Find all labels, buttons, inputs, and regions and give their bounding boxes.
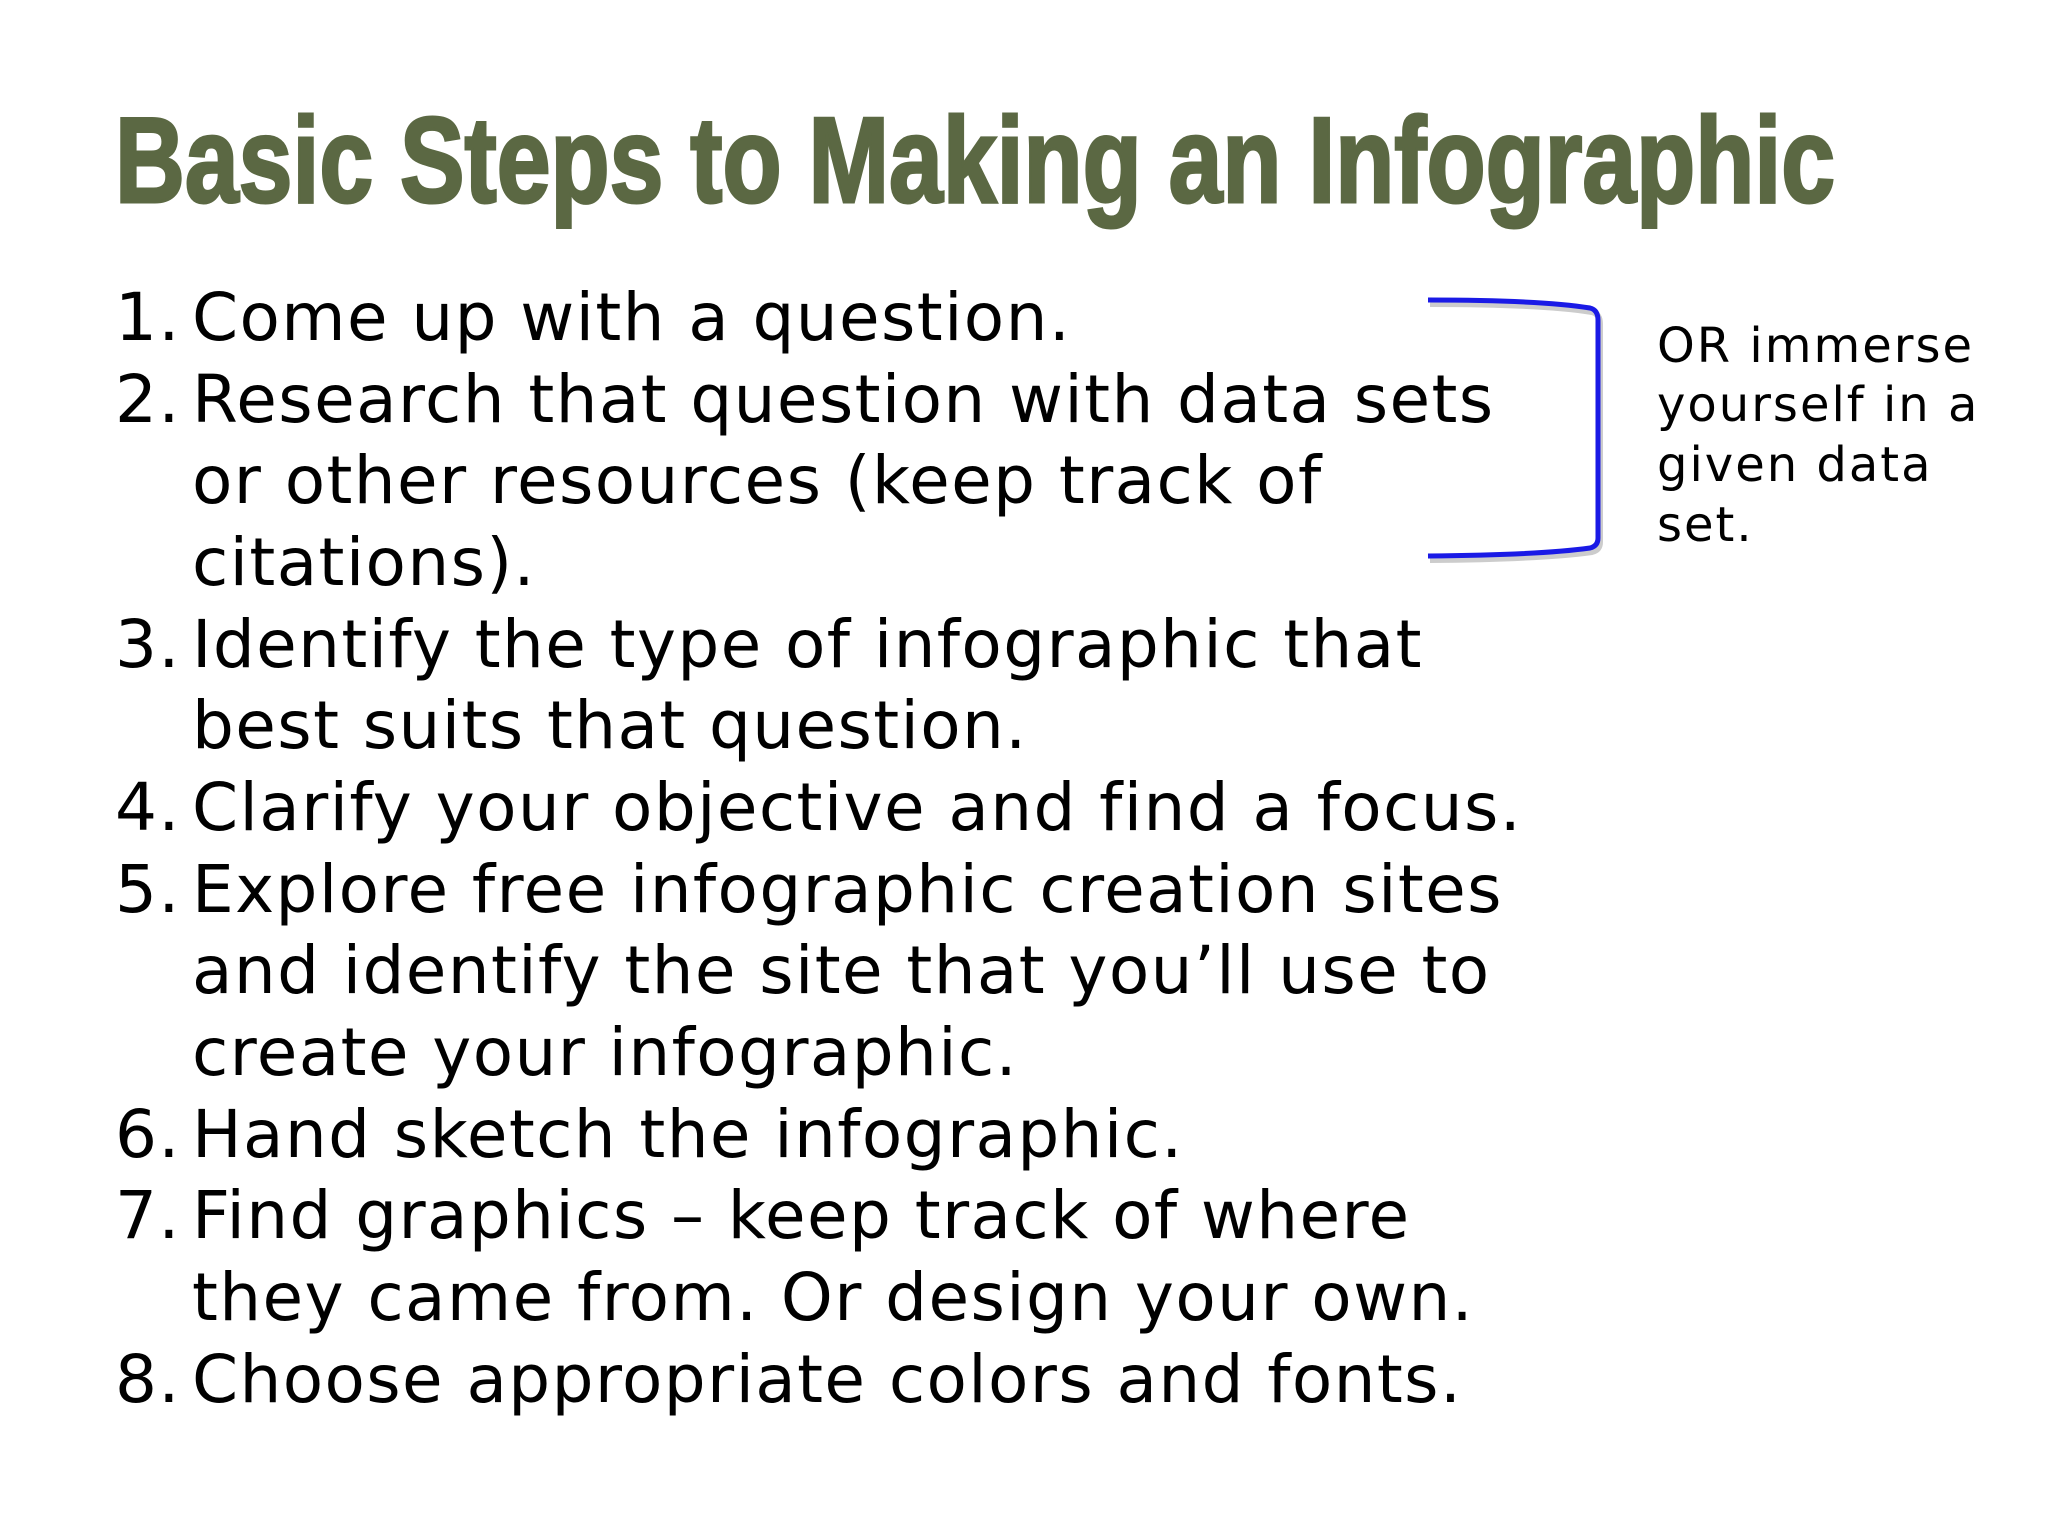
step 5: and identify the site that you’ll use to [192,932,1491,1009]
side note: set. [1657,497,1754,553]
step 7: Find graphics – keep track of where [192,1177,1411,1254]
side note: given data [1657,437,1933,493]
step 6: 6. [115,1096,181,1173]
side note: OR immerse [1657,318,1974,374]
step 5: create your infographic. [192,1014,1018,1091]
step 2: citations). [192,524,536,601]
step 7: they came from. Or design your own. [192,1259,1474,1336]
step 3: 3. [115,606,181,683]
step 3 [115,606,1423,764]
step 2: or other resources (keep track of [192,442,1323,519]
step 4: 4. [115,769,181,846]
step 8: 8. [115,1341,181,1418]
step 1: 1. [115,279,181,356]
step 3: best suits that question. [192,687,1028,764]
step 4: Clarify your objective and find a focus. [192,769,1522,846]
side note [1657,318,1979,553]
step 7: 7. [115,1177,181,1254]
step 5: Explore free infographic creation sites [192,851,1503,928]
step 2 [115,361,1495,601]
bracket [1428,300,1600,560]
step 5: 5. [115,851,181,928]
step 2: 2. [115,361,181,438]
step 6: Hand sketch the infographic. [192,1096,1184,1173]
step 8: Choose appropriate colors and fonts. [192,1341,1462,1418]
step 3: Identify the type of infographic that [192,606,1423,683]
step 7 [115,1177,1474,1336]
numbered steps list [115,279,1522,1418]
step 2: Research that question with data sets [192,361,1495,438]
step 5 [115,851,1503,1091]
side note: yourself in a [1657,377,1979,433]
step 1: Come up with a question. [192,279,1071,356]
